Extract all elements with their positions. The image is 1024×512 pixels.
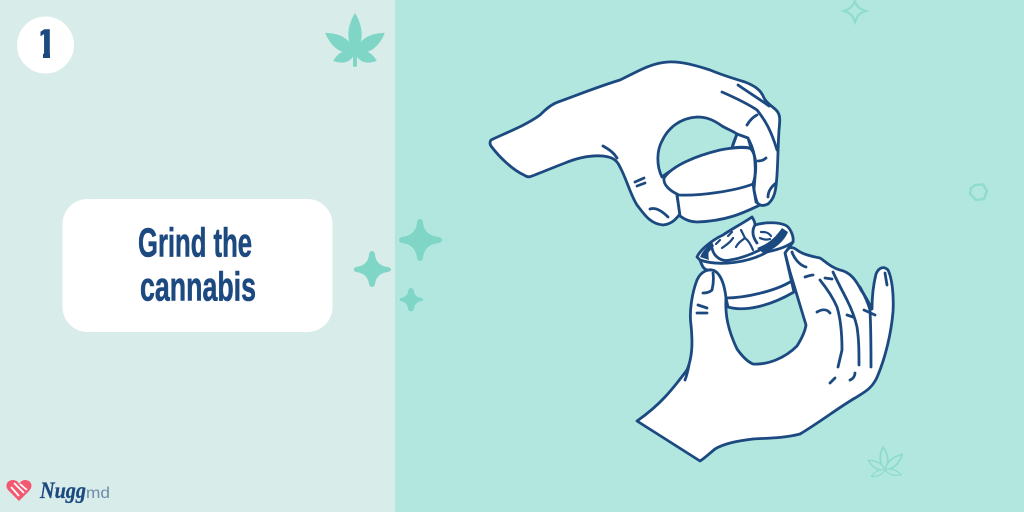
- icon: sparkle small: [400, 288, 423, 311]
- icon: cannabis leaf top: [321, 13, 389, 67]
- grinder rim: [697, 217, 793, 263]
- finger details: [603, 85, 777, 217]
- finger gap piece: [732, 134, 751, 148]
- panel: title card: [62, 199, 332, 332]
- step number badge: [17, 16, 74, 74]
- hand silhouette: [490, 62, 780, 225]
- icon: cannabis leaf outline: [867, 447, 905, 479]
- illustration: lower hand holding grinder base: [637, 217, 893, 461]
- icon: sparkle outline top: [844, 1, 866, 22]
- panel: right background: [395, 0, 1024, 512]
- wordmark suffix: md: [86, 485, 110, 502]
- lid side: [677, 184, 760, 222]
- cannabis detail marks: [716, 230, 771, 250]
- heading: line 1: Grind the: [138, 220, 252, 266]
- lid top: [664, 148, 756, 195]
- grinder base: [700, 230, 794, 309]
- icon: sparkle medium: [354, 251, 391, 287]
- gap between hand and lid: [658, 117, 737, 177]
- icon: striped heart: [6, 480, 32, 501]
- step number badge: 1: [34, 20, 58, 67]
- finger details: [685, 252, 887, 383]
- icon: sparkle large: [399, 219, 442, 261]
- grinder dark rim shading: [700, 228, 788, 260]
- wordmark: Nugg: [39, 478, 86, 503]
- logo: Nuggmd: [6, 478, 110, 503]
- illustration: upper hand holding grinder lid: [490, 62, 780, 225]
- cannabis contour: [712, 225, 770, 260]
- grinder ring line: [726, 282, 790, 298]
- heading: line 2: cannabis: [140, 264, 256, 310]
- hand silhouette: [637, 248, 893, 461]
- icon: hexagon outline: [970, 184, 987, 200]
- panel: left background: [0, 0, 395, 512]
